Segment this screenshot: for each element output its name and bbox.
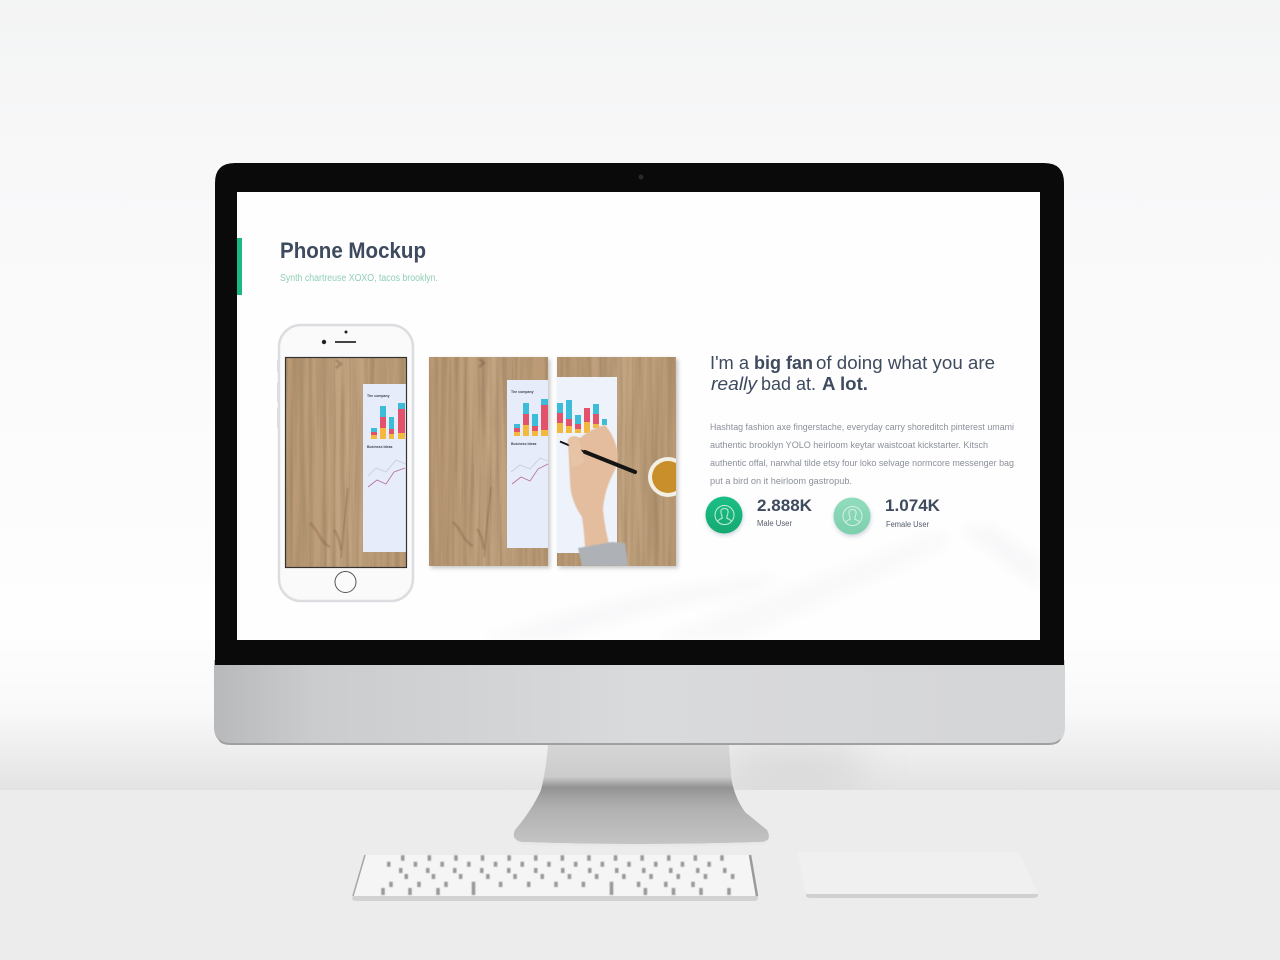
- bar chart: [371, 403, 405, 439]
- label: Female User: [886, 520, 929, 529]
- headline: really: [711, 373, 759, 394]
- paper subheading: Business Ideas: [511, 442, 537, 446]
- monitor chin: [214, 660, 1065, 744]
- headline: bad at.: [761, 373, 816, 394]
- monitor: [214, 163, 1065, 745]
- keyboard: [352, 855, 758, 901]
- icon: female user: [834, 498, 871, 536]
- phone screen photo: [286, 358, 407, 567]
- value: 1.074K: [885, 496, 941, 515]
- headline: A lot.: [822, 373, 868, 394]
- monitor bezel: [215, 163, 1064, 665]
- title: Phone Mockup: [280, 238, 426, 263]
- monitor stand: [514, 745, 770, 846]
- hand and arm: [568, 425, 618, 547]
- body paragraph: Hashtag fashion axe fingerstache, everyday carry shoreditch pinterest umami: [710, 422, 1014, 432]
- bar chart: [514, 399, 548, 436]
- body paragraph: put a bird on it heirloom gastropub.: [710, 476, 852, 486]
- coffee cup: [648, 457, 676, 497]
- body paragraph: [710, 422, 1014, 486]
- headline: of doing what you are: [816, 352, 995, 373]
- sleeve: [578, 542, 628, 566]
- phone camera and speaker: [322, 330, 356, 344]
- stand body: [514, 745, 769, 844]
- phone mockup: [278, 325, 414, 601]
- phone body: [279, 325, 413, 601]
- background swooshes: [480, 525, 1040, 640]
- thumb over pen: [568, 436, 583, 452]
- home button: [335, 572, 356, 592]
- desk surface: [0, 790, 1280, 960]
- trackpad: [797, 852, 1038, 898]
- stat: female user: [834, 496, 941, 536]
- keys: [383, 858, 735, 895]
- paper: [507, 380, 548, 548]
- body paragraph: authentic brooklyn YOLO heirloom keytar waistcoat kickstarter. Kitsch: [710, 440, 988, 450]
- label: Male User: [757, 519, 792, 528]
- paper heading: The company: [367, 394, 390, 398]
- pen: [560, 442, 635, 472]
- accent bar: [237, 238, 242, 295]
- headline: I'm a: [710, 352, 750, 373]
- paper: [557, 377, 617, 553]
- line chart: [368, 460, 406, 487]
- monitor shadow on wall: [730, 745, 860, 787]
- body paragraph: authentic offal, narwhal tilde etsy four loko selvage normcore messenger bag: [710, 458, 1014, 468]
- bar chart: [557, 400, 607, 433]
- subtitle: Synth chartreuse XOXO, tacos brooklyn.: [280, 273, 438, 284]
- photo left half: [429, 357, 550, 568]
- paper heading: The company: [511, 390, 534, 394]
- screen: [237, 192, 1040, 640]
- stand rim: [514, 836, 770, 846]
- photo right half: [557, 357, 688, 568]
- icon: male user: [706, 496, 743, 536]
- desk edge cover: [600, 790, 1100, 830]
- paper subheading: Business Ideas: [367, 445, 393, 449]
- chin bottom edge: [218, 738, 1061, 745]
- keyboard body: [353, 855, 757, 896]
- paper: [363, 384, 407, 552]
- value: 2.888K: [757, 496, 813, 515]
- headline: big fan: [754, 352, 813, 373]
- phone side buttons: [278, 360, 414, 428]
- webcam: [638, 174, 644, 180]
- line chart: [511, 458, 548, 484]
- stat: male user: [706, 496, 813, 536]
- phone screen border: [286, 358, 406, 568]
